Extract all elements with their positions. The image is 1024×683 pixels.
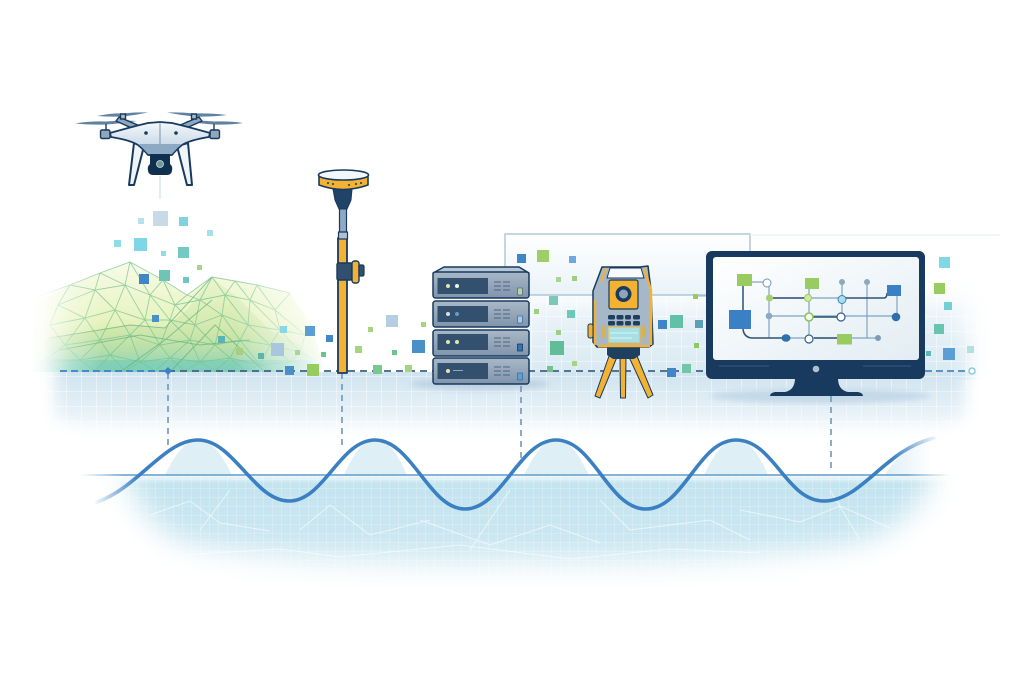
- monitor frame: [706, 251, 925, 379]
- wave crest tint: right end: [885, 439, 932, 475]
- panel: background frame behind instruments: [505, 234, 1000, 296]
- display: [608, 327, 640, 343]
- server unit 4: [433, 358, 529, 384]
- server unit 1: [433, 267, 529, 298]
- horizontal dashed data line: [60, 367, 975, 375]
- network diagram: [729, 274, 901, 344]
- panel: faint grid behind instruments: [513, 298, 976, 380]
- tripod head: [607, 347, 640, 359]
- data squares: [114, 211, 974, 377]
- icon: total station on tripod: [588, 266, 653, 398]
- drone legs: [129, 143, 192, 185]
- wave curve: [97, 438, 934, 509]
- wave baseline: [80, 474, 950, 476]
- drone body: [110, 122, 210, 155]
- icon: computer monitor: [706, 251, 925, 396]
- monitor screen: [713, 257, 919, 360]
- icon: drone: [75, 112, 243, 199]
- monitor stand: [770, 378, 863, 396]
- server unit 2: [433, 301, 529, 327]
- wave crest tint: [165, 440, 768, 475]
- panel: ground band with grid: [48, 372, 972, 426]
- tripod legs: [595, 356, 653, 398]
- panel: subsurface water body: [116, 476, 944, 575]
- infographic scene: survey data flow: [39, 112, 1000, 575]
- lens housing: [609, 280, 638, 309]
- icon: server rack: [433, 267, 529, 384]
- drone camera: [148, 154, 172, 175]
- drone propellers: [75, 112, 243, 125]
- keypad: [608, 315, 640, 326]
- drone arms and motors: [100, 114, 220, 138]
- server unit 3: [433, 330, 529, 356]
- terrain mesh: [30, 262, 325, 372]
- vertical dashed connectors: [168, 373, 831, 472]
- instrument body: [593, 266, 653, 347]
- icon: GNSS survey pole: [318, 170, 368, 373]
